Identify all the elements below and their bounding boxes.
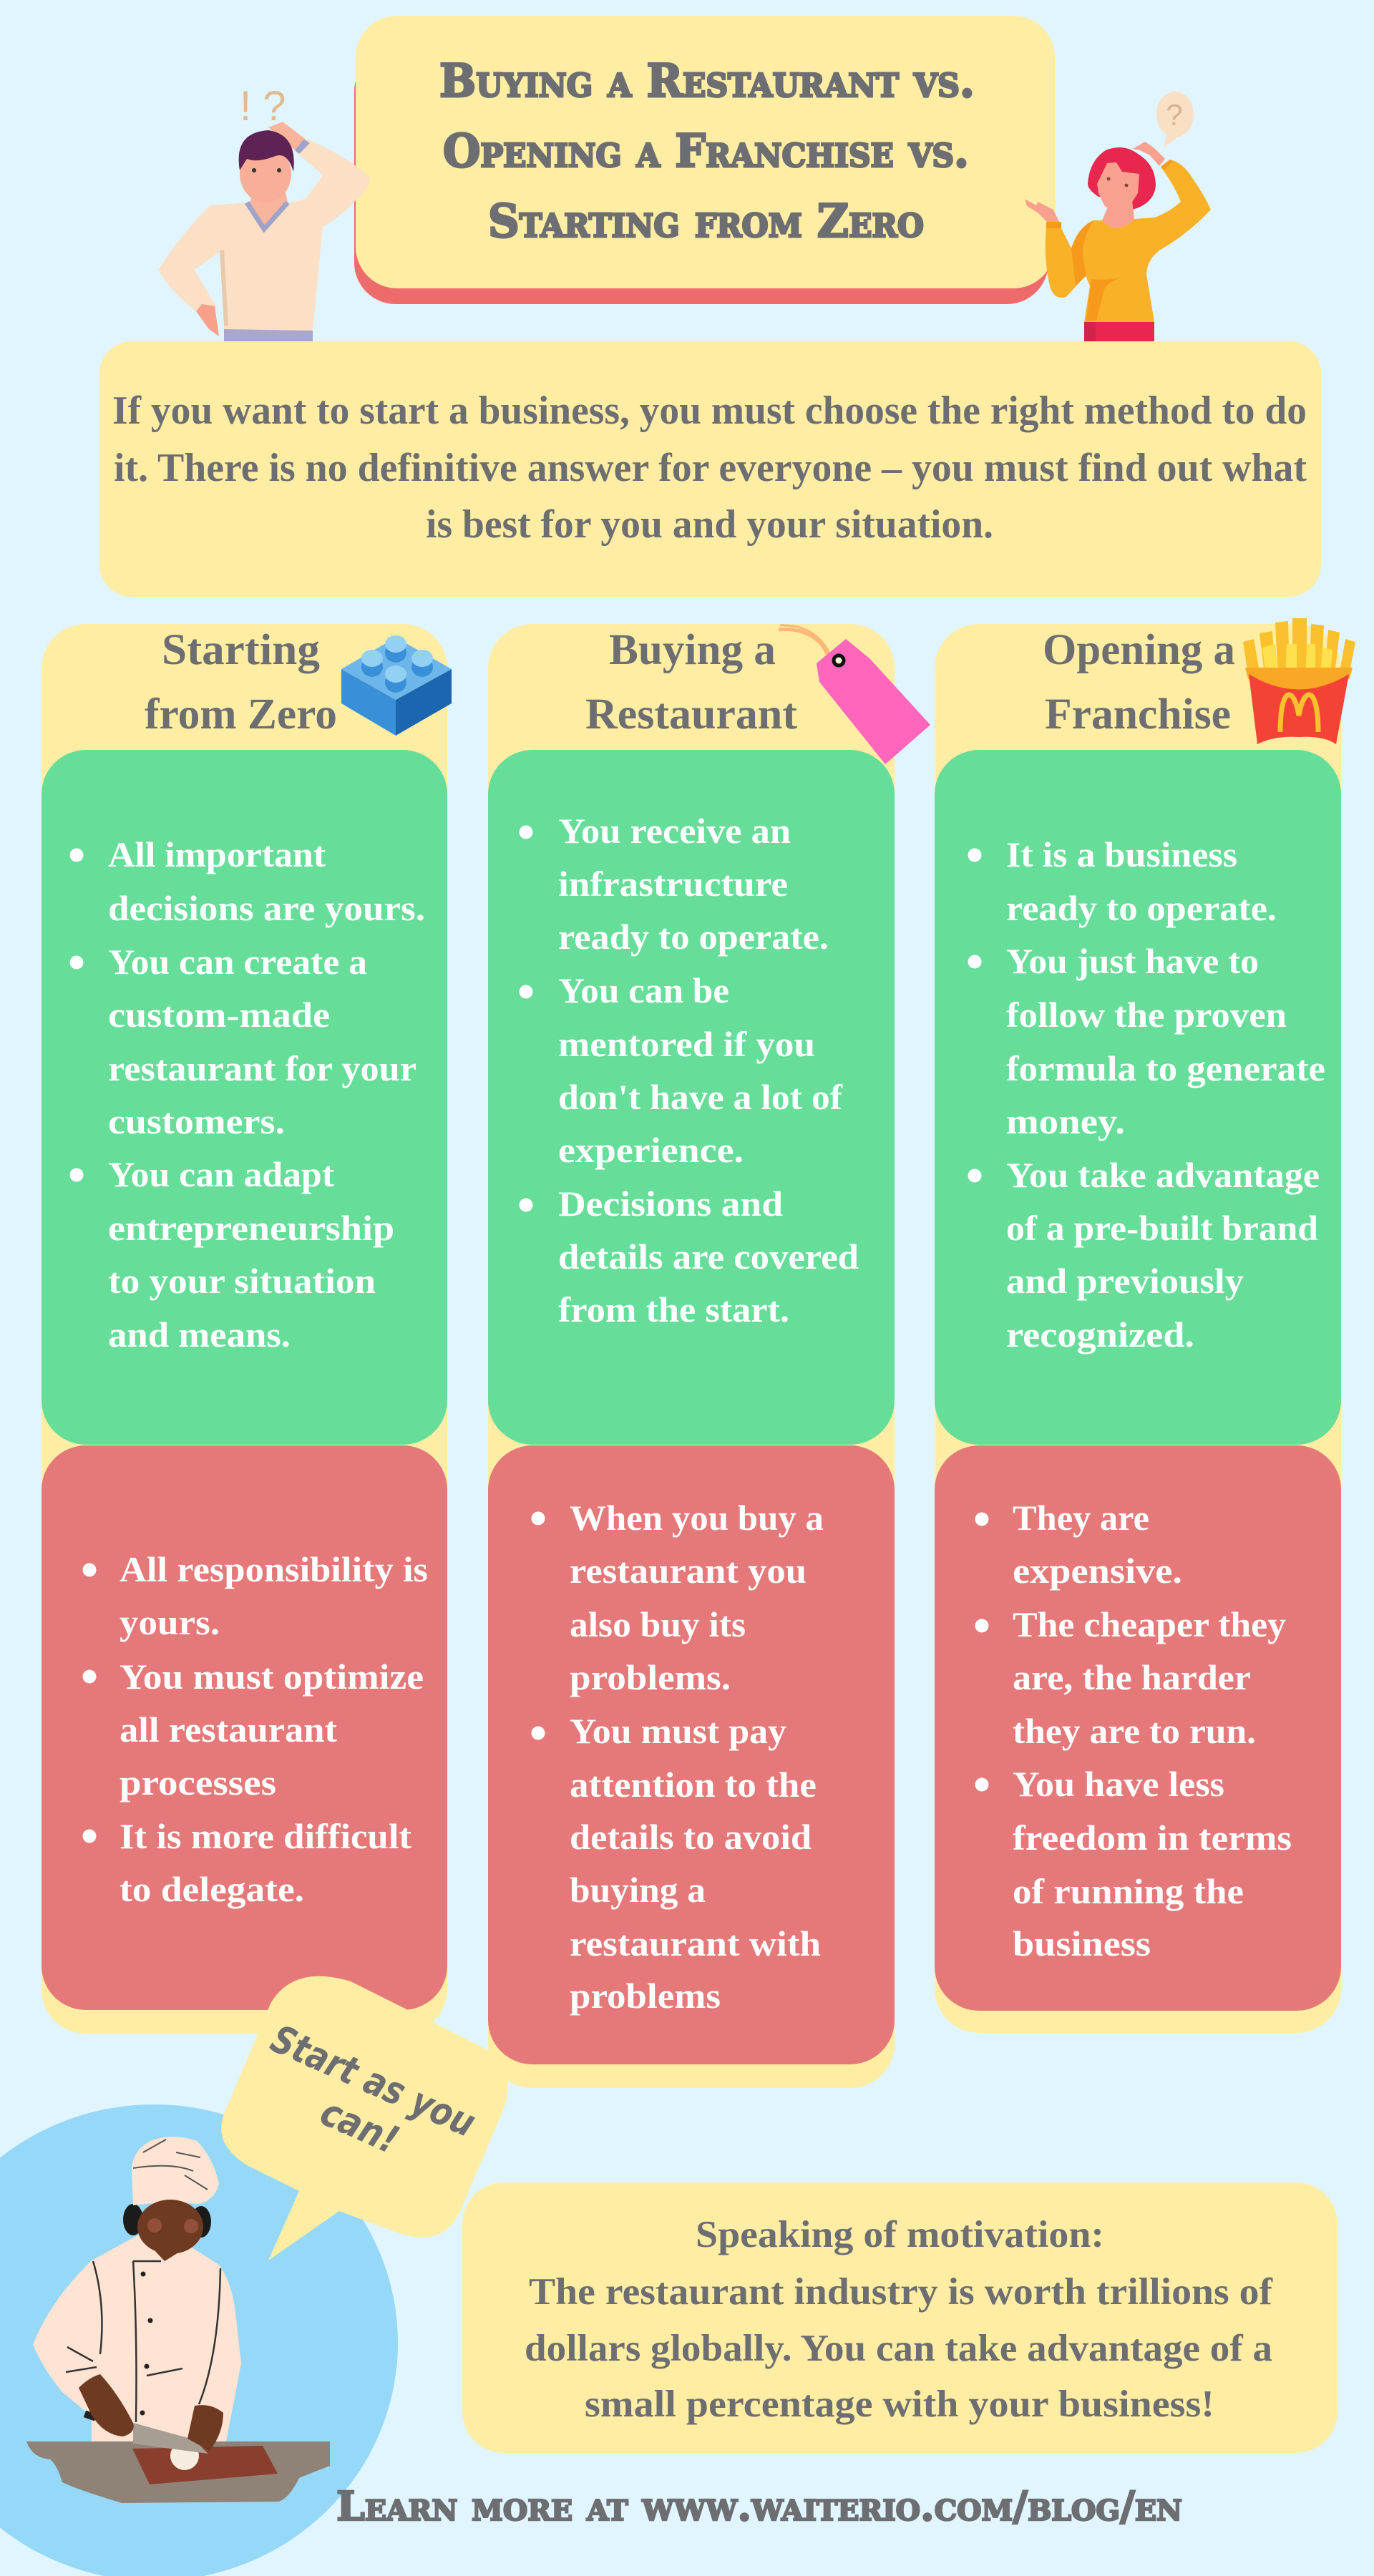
cons panel: opening a franchise: of running the: [1013, 1871, 1244, 1911]
heading: opening a franchise: Opening a: [1043, 626, 1235, 674]
cons panel: buying a restaurant: details to avoid: [570, 1817, 812, 1857]
pros panel: buying a restaurant: details are covered: [558, 1236, 859, 1277]
icon: confused man: ! ?: [240, 83, 286, 130]
motivation text: Speaking of motivation:: [696, 2214, 1104, 2255]
cons panel: opening a franchise: are, the harder: [1013, 1657, 1251, 1697]
pros panel: starting from zero: restaurant for your: [108, 1048, 416, 1088]
heading: buying a restaurant: Buying a: [609, 626, 776, 674]
motivation text: [525, 2214, 1273, 2425]
pros panel: buying a restaurant: ready to operate.: [558, 917, 829, 957]
pros panel: starting from zero: to your situation: [108, 1261, 376, 1301]
pros panel: opening a franchise: and previously: [1006, 1261, 1244, 1301]
pros panel: starting from zero: You can create a: [108, 942, 367, 982]
title: Opening a Franchise vs.: [443, 125, 969, 178]
pros panel: opening a franchise: [935, 750, 1341, 1445]
pros panel: buying a restaurant: You can be: [558, 970, 729, 1010]
pros panel: opening a franchise: It is a business: [1006, 834, 1237, 874]
cons panel: starting from zero: yours.: [120, 1602, 220, 1642]
pros panel: opening a franchise: ready to operate.: [1006, 888, 1277, 928]
cons panel: opening a franchise: business: [1013, 1923, 1151, 1963]
icon: confused man: [158, 83, 370, 342]
icon: chef: [26, 2137, 330, 2503]
intro text: it. There is no definitive answer for everyone – you must find out what: [114, 446, 1307, 490]
title: Buying a Restaurant vs.: [439, 54, 975, 108]
intro text: If you want to start a business, you must choose the right method to do: [112, 389, 1307, 433]
pros panel: starting from zero: decisions are yours.: [108, 888, 425, 928]
heading: starting from zero: from Zero: [145, 691, 337, 738]
cons panel: starting from zero: all restaurant: [120, 1709, 337, 1750]
heading: buying a restaurant: Restaurant: [585, 691, 798, 738]
cons panel: buying a restaurant: When you buy a: [570, 1498, 824, 1538]
cons panel: buying a restaurant: [488, 1445, 895, 2064]
cons panel: starting from zero: processes: [120, 1762, 276, 1802]
intro panel: [99, 341, 1321, 597]
panel: motivation: [462, 2182, 1338, 2453]
cons panel: buying a restaurant: problems.: [570, 1657, 731, 1697]
title: Starting from Zero: [488, 195, 924, 248]
pros panel: buying a restaurant: Decisions and: [558, 1184, 783, 1224]
cons panel: opening a franchise: freedom in terms: [1013, 1818, 1292, 1858]
cons panel: opening a franchise: they are to run.: [1013, 1711, 1256, 1751]
cons panel: starting from zero: All responsibility is: [120, 1549, 428, 1589]
heading: starting from zero: [145, 626, 337, 738]
cons panel: buying a restaurant: You must pay: [570, 1711, 786, 1751]
callout: start as you can: [221, 1976, 508, 2260]
heading: buying a restaurant: [585, 626, 798, 738]
pros panel: buying a restaurant: experience.: [558, 1130, 744, 1170]
motivation text: dollars globally. You can take advantage of a: [525, 2328, 1272, 2369]
pros panel: buying a restaurant: don't have a lot of: [558, 1077, 843, 1117]
panel: starting from zero: [42, 624, 447, 2034]
cons panel: opening a franchise: [935, 1445, 1341, 2011]
pros panel: buying a restaurant: You receive an: [558, 811, 791, 851]
title: [439, 54, 975, 248]
cons panel: opening a franchise: The cheaper they: [1013, 1604, 1286, 1644]
cons panel: buying a restaurant: buying a: [570, 1870, 706, 1910]
cons panel: buying a restaurant: attention to the: [570, 1765, 817, 1805]
motivation text: small percentage with your business!: [585, 2384, 1214, 2425]
cons panel: buying a restaurant: restaurant you: [570, 1551, 807, 1591]
heading: opening a franchise: [1043, 626, 1235, 738]
pros panel: starting from zero: customers.: [108, 1101, 285, 1141]
heading: opening a franchise: Franchise: [1045, 691, 1231, 738]
title panel: [354, 16, 1055, 304]
panel: buying a restaurant: [488, 624, 895, 2088]
pros panel: buying a restaurant: from the start.: [558, 1289, 789, 1330]
icon: french fries: [1243, 618, 1355, 744]
pros panel: buying a restaurant: [488, 750, 895, 1445]
intro text: [112, 389, 1307, 547]
cons panel: starting from zero: It is more difficult: [120, 1816, 411, 1856]
pros panel: opening a franchise: recognized.: [1006, 1314, 1194, 1355]
pros panel: opening a franchise: money.: [1006, 1101, 1125, 1141]
icon: confused woman: [1025, 92, 1211, 341]
cons panel: starting from zero: [42, 1445, 447, 2010]
cons panel: opening a franchise: expensive.: [1013, 1551, 1182, 1591]
cons panel: buying a restaurant: restaurant with: [570, 1923, 821, 1963]
pros panel: starting from zero: and means.: [108, 1314, 291, 1355]
cons panel: buying a restaurant: problems: [570, 1976, 721, 2016]
pros panel: opening a franchise: You take advantage: [1006, 1155, 1320, 1195]
footer link: Learn more at www.waiterio.com/blog/en: [336, 2483, 1182, 2530]
blue circle background: [0, 2104, 398, 2576]
intro text: is best for you and your situation.: [426, 502, 993, 547]
callout: start as you can: can!: [314, 2089, 405, 2163]
motivation text: The restaurant industry is worth trillions of: [529, 2271, 1273, 2313]
callout: start as you can: Start as you: [264, 2016, 482, 2146]
pros panel: starting from zero: You can adapt: [108, 1154, 334, 1194]
pros panel: starting from zero: [42, 750, 447, 1445]
pros panel: opening a franchise: formula to generate: [1006, 1048, 1325, 1088]
pros panel: starting from zero: custom-made: [108, 995, 330, 1035]
pros panel: opening a franchise: You just have to: [1006, 941, 1259, 981]
cons panel: starting from zero: You must optimize: [120, 1657, 424, 1697]
cons panel: opening a franchise: You have less: [1013, 1764, 1224, 1804]
cons panel: buying a restaurant: also buy its: [570, 1604, 746, 1644]
pros panel: starting from zero: All important: [108, 834, 326, 874]
icon: price tag: [779, 625, 930, 764]
cons panel: opening a franchise: They are: [1013, 1498, 1149, 1538]
cons panel: starting from zero: to delegate.: [120, 1869, 304, 1909]
pros panel: buying a restaurant: infrastructure: [558, 864, 788, 904]
pros panel: buying a restaurant: mentored if you: [558, 1024, 815, 1064]
pros panel: opening a franchise: follow the proven: [1006, 995, 1287, 1035]
pros panel: opening a franchise: of a pre-built brand: [1006, 1208, 1318, 1248]
icon: confused woman: ?: [1166, 98, 1183, 132]
icon: lego brick: [341, 635, 452, 736]
heading: starting from zero: Starting: [162, 626, 320, 674]
panel: opening a franchise: [935, 624, 1341, 2033]
pros panel: starting from zero: entrepreneurship: [108, 1208, 394, 1248]
